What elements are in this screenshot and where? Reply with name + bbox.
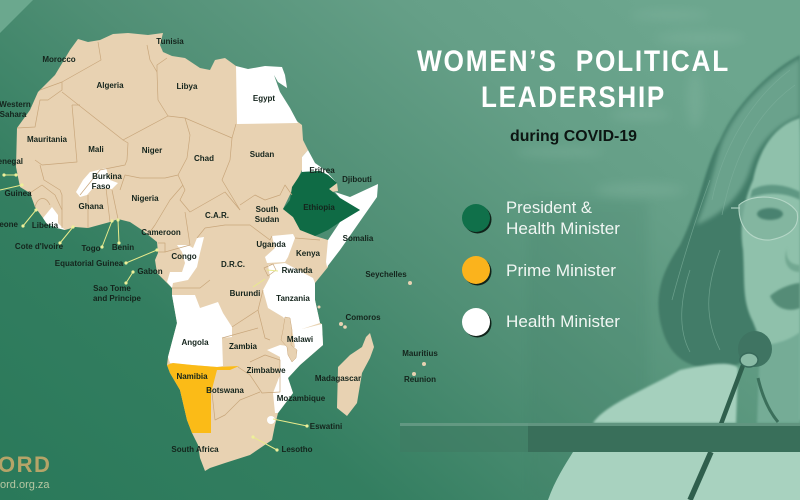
country: Eritrea: [302, 150, 336, 182]
country labels: Tanzania: [276, 294, 310, 303]
face: [742, 118, 800, 420]
microphone collar: [740, 353, 758, 367]
country labels: and Principe: [93, 294, 142, 303]
country labels: Zimbabwe: [246, 366, 286, 375]
country labels: Tunisia: [156, 37, 184, 46]
country labels: Djibouti: [342, 175, 372, 184]
country labels: Burkina: [92, 172, 122, 181]
country labels: Eritrea: [309, 166, 335, 175]
country labels: Uganda: [256, 240, 286, 249]
eye: [757, 208, 783, 220]
country labels: Ghana: [79, 202, 104, 211]
podium highlight: [400, 423, 800, 426]
legend: [462, 198, 620, 338]
country: Somalia: [326, 184, 378, 267]
country labels: Mozambique: [277, 394, 326, 403]
legend: Health Minister: [462, 308, 620, 338]
country labels: Burundi: [230, 289, 260, 298]
title: LEADERSHIP: [481, 81, 666, 114]
country labels: Eswatini: [310, 422, 342, 431]
country labels: Morocco: [42, 55, 76, 64]
country labels: Ethiopia: [303, 203, 335, 212]
country: Namibia: [167, 363, 239, 433]
country labels: D.R.C.: [221, 260, 245, 269]
legend: Prime Minister: Prime Minister: [506, 261, 616, 280]
country: Angola: [168, 295, 232, 367]
legend: Health Minister: Health Minister: [506, 312, 620, 331]
shirt lower: [548, 452, 800, 500]
country labels: Cote d'Ivoire: [15, 242, 64, 251]
country labels: Sudan: [250, 150, 274, 159]
country labels: South: [256, 205, 278, 214]
hair: [658, 55, 800, 368]
country labels: Sahara: [0, 110, 27, 119]
glasses: [731, 197, 798, 240]
country: Burkina Faso: [76, 168, 118, 197]
country labels: Congo: [171, 252, 197, 261]
brow and forehead shade: [750, 185, 800, 200]
hair strands: [672, 70, 795, 352]
country labels: Western: [0, 100, 31, 109]
country labels: Malawi: [287, 335, 313, 344]
country labels: Sudan: [255, 215, 279, 224]
subtitle: during COVID-19: [510, 128, 637, 145]
country labels: [0, 37, 438, 454]
upper hair highlights: [696, 58, 800, 225]
country labels: Botswana: [206, 386, 244, 395]
country labels: Lesotho: [281, 445, 313, 454]
nose shadow: [785, 248, 800, 272]
country labels: Equatorial Guinea: [55, 259, 124, 268]
country labels: Kenya: [296, 249, 321, 258]
logo and website: ord.org.za: [0, 479, 50, 491]
country labels: Madagascar: [315, 374, 361, 383]
country labels: Zambia: [229, 342, 258, 351]
country: Ethiopia: [283, 171, 360, 236]
country: Djibouti area: [329, 183, 338, 192]
country labels: Mali: [88, 145, 104, 154]
country: Tanzania: [263, 263, 320, 329]
country labels: Guinea: [4, 189, 32, 198]
country labels: Nigeria: [131, 194, 159, 203]
title: [417, 45, 730, 114]
map of Africa: [0, 33, 438, 471]
country labels: Seychelles: [365, 270, 407, 279]
country labels: Gabon: [137, 267, 163, 276]
microphone head: [738, 331, 772, 367]
country: Madagascar: [337, 333, 374, 416]
country labels: Benin: [112, 243, 134, 252]
microphone stem upper: [721, 352, 748, 424]
country labels: Angola: [181, 338, 209, 347]
country labels: Mauritius: [402, 349, 438, 358]
logo and website: [0, 452, 51, 491]
country labels: Niger: [142, 146, 162, 155]
podium bar faded section: [400, 423, 528, 452]
country labels: Algeria: [96, 81, 124, 90]
country labels: South Africa: [171, 445, 219, 454]
country labels: Faso: [92, 182, 110, 191]
country labels: Egypt: [253, 94, 275, 103]
country labels: Libya: [177, 82, 198, 91]
country labels: Rwanda: [282, 266, 313, 275]
country: Liberia: [43, 207, 65, 230]
country: Eswatini: [267, 416, 275, 424]
country labels: Liberia: [32, 221, 59, 230]
legend: Prime Minister: [462, 256, 616, 286]
country: Malawi: [281, 317, 297, 362]
country borders: [17, 42, 320, 420]
country labels: Comoros: [345, 313, 381, 322]
mouth: [770, 283, 800, 310]
continent base: [16, 33, 328, 471]
country: Egypt: [236, 66, 298, 124]
country: Uganda: [265, 234, 295, 263]
country: Congo: [167, 237, 204, 288]
microphone stem lower: [690, 452, 711, 500]
photo: speaker at podium: [400, 55, 800, 500]
country labels: Chad: [194, 154, 214, 163]
legend: President and Health Minister: [462, 198, 620, 238]
legend: President and Health Minister: President &: [506, 198, 593, 217]
podium bar: [528, 423, 800, 452]
shirt upper: [593, 364, 738, 423]
legend: President and Health Minister: Health Minister: [506, 219, 620, 238]
title: WOMEN’S POLITICAL: [417, 45, 730, 78]
country labels: Reunion: [404, 375, 436, 384]
country labels: Somalia: [343, 234, 374, 243]
country labels: Mauritania: [27, 135, 68, 144]
necklace: [758, 378, 778, 422]
country labels: Sao Tome: [93, 284, 131, 293]
country labels: C.A.R.: [205, 211, 229, 220]
country labels: Togo: [82, 244, 101, 253]
country labels: Cameroon: [141, 228, 181, 237]
country labels: Namibia: [176, 372, 208, 381]
country: Mozambique: [267, 324, 323, 413]
leader lines: [0, 173, 309, 452]
islands: [318, 281, 426, 376]
neck shadow: [757, 332, 800, 423]
